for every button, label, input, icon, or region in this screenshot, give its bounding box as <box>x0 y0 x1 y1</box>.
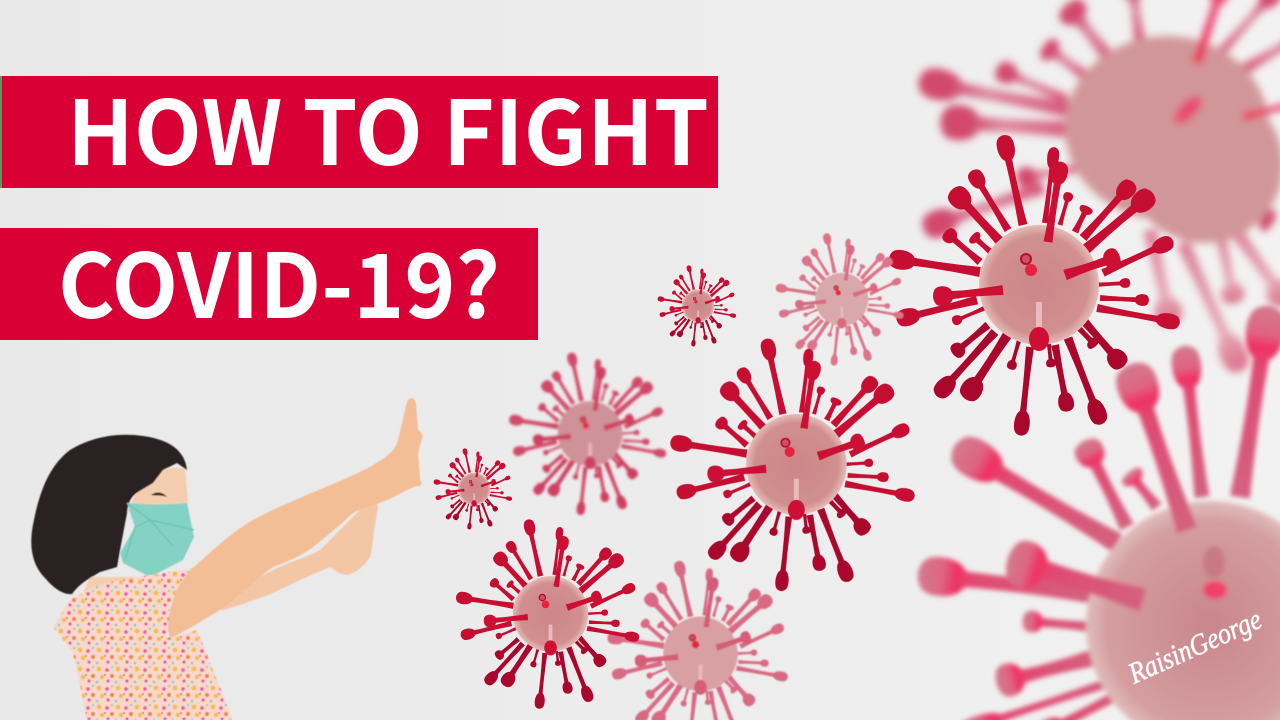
sharp virus, centre <box>669 337 916 592</box>
title banner line 1: HOW TO FIGHT <box>67 62 709 191</box>
near arm and hand <box>168 398 422 638</box>
neck and face <box>84 467 188 592</box>
far arm <box>220 502 378 610</box>
eye <box>151 493 167 497</box>
blurred virus, centre <box>508 352 667 515</box>
floral dress <box>53 568 233 720</box>
small sharp virus, upper middle <box>657 265 736 347</box>
small sharp virus near hand <box>433 448 512 530</box>
title banner line 2: COVID-19? <box>58 215 500 344</box>
child wearing a mask with raised hands <box>31 398 422 720</box>
sharp virus, bottom left of cluster <box>455 518 640 709</box>
blurred virus, bottom centre <box>607 560 789 720</box>
blurred virus, upper middle <box>775 233 904 366</box>
hair <box>31 435 187 594</box>
sharp virus, upper right <box>888 133 1181 436</box>
mask pleats <box>125 503 194 560</box>
large blurred virus, bottom right <box>916 303 1280 720</box>
surgical mask <box>120 503 194 577</box>
large blurred virus, top right <box>916 0 1280 377</box>
